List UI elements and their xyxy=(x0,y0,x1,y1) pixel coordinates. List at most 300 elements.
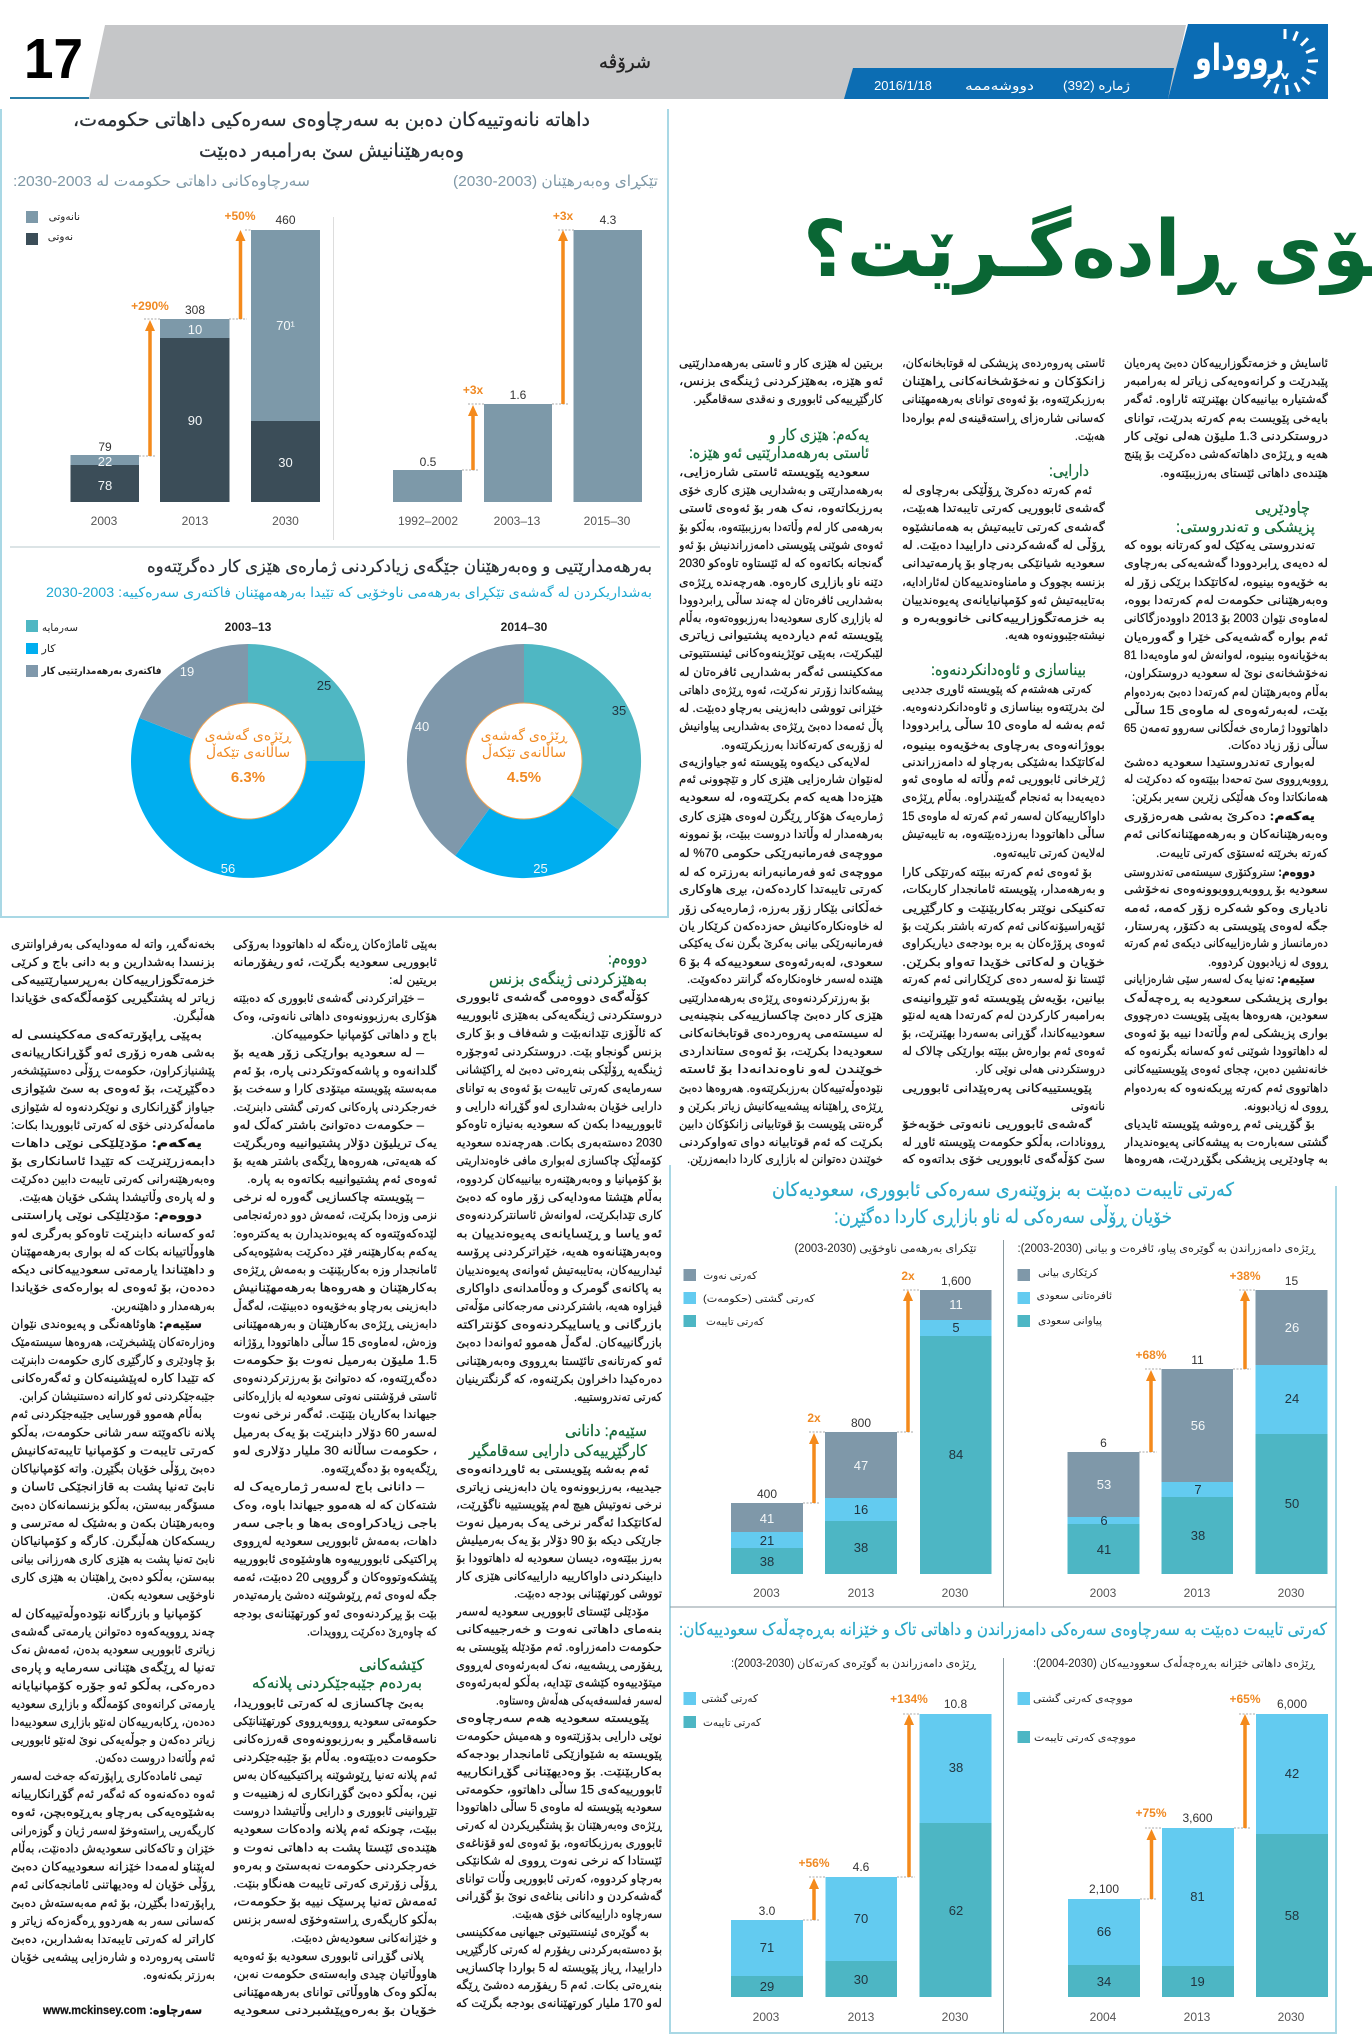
growth arrows: +38% xyxy=(1229,1269,1261,1283)
donut chart 2003-13: 2003–13 xyxy=(225,620,272,634)
text column: business environment and fiscal management: بەهێزکردنی ژینگەی بزنس xyxy=(489,970,647,988)
text column: business environment and fiscal management: دروستکردنی ژینگەیەکی بەهێزی ئابوورییە xyxy=(456,1008,662,1023)
text column: finance and construction: دارایی: xyxy=(1049,463,1089,480)
bars 2013: 16 xyxy=(854,1502,868,1517)
text column: business environment and fiscal management: سعودیە پێویستە لە ماوەی 5 ساڵی داهاتوودا xyxy=(456,1799,662,1815)
text column: role of government and business: بزنسدا بەشدارین و بە دانی باج و کرێی xyxy=(11,955,215,970)
panel heading xyxy=(13,110,658,190)
bar chart: average investment: 0.5 xyxy=(420,455,437,469)
bars 2003: 2003 xyxy=(753,1586,780,1600)
bars 2030: 15 xyxy=(1285,1274,1298,1288)
text column: business environment and fiscal management: بە پاکانەی گومرک و وەڵامدانەی داواکاری xyxy=(456,1280,662,1296)
bars 2030: 2030 xyxy=(942,1586,969,1600)
text column: reforms and challenges: هاووڵاتیان چیدی وابەستەی حکومەت نەبن، xyxy=(233,1966,437,1982)
donut centre label: ساڵانەی تێکەڵ xyxy=(482,743,566,760)
bars 2030: 2030 xyxy=(1278,1586,1305,1600)
bars 2030 xyxy=(1256,1274,1328,1600)
text column: role of government and business: جیاواز گۆڕانکاری و نوێکردنەوە لە شێوازی xyxy=(11,1100,215,1115)
bars 2030: 50 xyxy=(1285,1496,1299,1511)
bars 2013: 11 xyxy=(1191,1353,1204,1367)
logo: ڕووداو xyxy=(1193,37,1290,79)
text column: business environment and fiscal management: وەبەرهێنانەوە هەیە، خێراترکردنی پرۆسە xyxy=(456,1245,662,1260)
text column: role of government and business: دابمەزرێنرێت کە تێیدا ئاسانکاری بۆ xyxy=(11,1154,215,1169)
text column: tourism and health: گەشتیارە بیانییەکان بهێنرێتە ئاراوە. ئەگەر xyxy=(1124,392,1328,407)
text column: role of government and business: یەکەم: مۆدێلێکی نوێی داهات xyxy=(11,1136,202,1151)
text column: tourism and health: بە خۆیەوە بینیوە، لەکاتێکدا برێکی زۆر لە xyxy=(1124,575,1328,590)
bars 2030: 24 xyxy=(1285,1391,1299,1406)
bars 2013: 70 xyxy=(854,1911,868,1926)
text column: business environment and fiscal management: کۆڵەگەی دووەمی گەشەی ئابووری xyxy=(456,989,649,1005)
issue bar: 2016/1/18 xyxy=(874,78,932,93)
text column: business environment and fiscal management: دابینکردنی داواکارییە داراییەکانی هێزی کار xyxy=(456,1569,662,1584)
text column: business environment and fiscal management: لەکاتێکدا ئەگەر نرخی یەک بەرمیل نەوت xyxy=(456,1515,662,1530)
text column: business environment and fiscal management: بنەڕەتی بکات. ئەم 5 ریفۆرمە دەشێ ڕێگە xyxy=(456,1978,662,1993)
text column: labour force: بریتین لە هێزی کار و ئاستی بەرهەمدارێتیی xyxy=(679,356,883,371)
section heading: productivity and investment xyxy=(10,546,660,601)
donut chart 2014-30: 2014–30 xyxy=(501,620,548,634)
bars 2013: 3,600 xyxy=(1182,1811,1213,1825)
bars 2030: 38 xyxy=(949,1760,963,1775)
text column: business environment and fiscal management: کارگێڕییەکی دارایی سەقامگیر xyxy=(468,1442,648,1460)
text column: tourism and health: بواری پزیشکی لەم وڵاتەدا نییە بۆ ئەوەی xyxy=(1124,1025,1328,1041)
bars 2004: 66 xyxy=(1097,1924,1111,1939)
text column: finance and construction: ساڵی داهاتوودا بەرزدەبێتەوە، بە تایبەتیش xyxy=(902,826,1105,842)
text column: labour force: لەنێوان شارەزایی هێزی کار و تێچوونی ئەم xyxy=(679,772,883,787)
text column: role of government and business: تەنیا لە ڕێگەی هێنانی سەرمایە و پارەی xyxy=(11,1661,215,1676)
text column: tourism and health: گشتی سەبارەت بە پیشەکانی پەیوەندیدار xyxy=(1124,1135,1328,1150)
donut chart 2014-30: 40 xyxy=(415,719,429,734)
legend: کەرتی گشتی xyxy=(701,1692,758,1705)
text column: reforms and challenges: پلانی گۆڕانی ئابووری سعودیە بۆ ئەوەیە xyxy=(233,1949,424,1964)
text column: role of government and business: کۆمپانیا و بازرگانە نێودەوڵەتییەکان لە xyxy=(11,1605,202,1621)
stacked bar chart: household income xyxy=(1018,1692,1328,2024)
text column: business environment and fiscal management: بازرگانییەکان. لەگەڵ هەموو ئەوانەدا دەبێ xyxy=(456,1335,662,1351)
text column: tourism and health: دووەم: ستروکتۆری سیستەمی تەندروستی xyxy=(1124,865,1315,880)
bars 2013: 47 xyxy=(854,1458,868,1473)
text column: role of government and business: ببەستن، بەڵکو دەبێ ڕاهێنان بە هێزی کاری xyxy=(11,1569,215,1585)
bar 2030: 460 xyxy=(275,213,296,227)
text column: tourism and health: لە داهاتوودا شوێنی ئەو کەسانە بگرنەوە کە xyxy=(1124,1044,1328,1059)
text column: tourism and health: لەماوەی نێوان 2003 بۆ 2013 داوودەزگاکانی xyxy=(1124,611,1328,626)
text column: reforms and challenges: باج و داهاتی کۆمپانیا حکومییەکان. xyxy=(271,1028,437,1042)
bars 2013: 56 xyxy=(1191,1418,1205,1433)
text column: tourism and health: سعودین، هەروەها بەپێی پێویست دەرچووی xyxy=(1124,1008,1328,1023)
legend: growth factors: سەرمایە xyxy=(42,622,78,634)
text column: business environment and fiscal management: لەو 170 ملیار کورتهێنانەی بودجە بگرێت کە xyxy=(456,1996,662,2011)
text column: business environment and fiscal management xyxy=(456,951,662,2011)
donut chart 2003-13 xyxy=(131,620,365,878)
text column: finance and construction: بەتایبەتیش ئەو کۆمپانیایانەی پەیوەندییان xyxy=(902,593,1105,608)
bars 2003: 29 xyxy=(760,1979,774,1994)
panel heading: سەرچاوەکانی داهاتی حکومەت لە 2003-2030: xyxy=(13,173,310,190)
text column: reforms and challenges: مەبەستە پێویستە میتۆدی کارا و سەخت بۆ xyxy=(233,1082,437,1097)
text column: finance and construction: ئەم کەرتە دەکرێ ڕۆڵێکی بەرچاوی لە xyxy=(902,482,1092,498)
text column: tourism and health: پزیشکی و تەندروستی: xyxy=(1176,519,1315,537)
growth arrows: +134% xyxy=(890,1692,928,1706)
text column: reforms and challenges: ، حکومەت ساڵانە 30 ملیار دۆلاری لەو xyxy=(233,1442,437,1458)
bars 2004: 2004 xyxy=(1090,2010,1117,2024)
bars 2030: 5 xyxy=(952,1320,960,1335)
growth arrows: 2x xyxy=(901,1269,915,1283)
text column: finance and construction: ئێستا نۆ لەسەر دەی کرێکارانی ئەم کەرتە xyxy=(902,972,1105,987)
text column: finance and construction: کەسانی شارەزای ڕاستەقینەی لەم بوارەدا xyxy=(902,411,1105,426)
bars 2003: 400 xyxy=(757,1487,777,1501)
donut centre label: 6.3% xyxy=(231,769,265,786)
text column: reforms and challenges: ناسەقامگیر و بەرزبوونەوەی قەرزەکانی xyxy=(233,1732,437,1747)
text column: business environment and fiscal management: 2030 دەستەبەری بکات. هەرچەندە سعودیە xyxy=(456,1136,662,1150)
growth arrows: +56% xyxy=(798,1856,830,1870)
text column: tourism and health: لەبواری تەندروستیدا سعودیە دەشێ xyxy=(1124,755,1315,770)
text column: finance and construction: بەرامبەر کارکردن لەم کەرتەدا هەیە لەنێو xyxy=(902,1008,1105,1023)
text column: labour force: لە سیستەمی پەروەردەی قوتابخانەکانی xyxy=(679,1026,883,1041)
bar 2013: 2013 xyxy=(182,514,209,528)
text column: reforms and challenges: گلدانەوە و پاشەکەوتکردنی پارە، بۆ ئەم xyxy=(233,1064,437,1079)
legend: نانەوتی xyxy=(49,211,80,223)
section heading: productivity and investment: بەشداریکردن لە گەشەی تێکڕای بەرهەمی ناوخۆیی کە تێیدا بەرهەمهێنان فاکتەری سەرەکییە: 2003-2030 xyxy=(46,584,652,601)
text column: reforms and challenges: ڕۆڵی زۆرتری کەرتی تایبەت هەنگاو بنێت. xyxy=(233,1876,437,1892)
text column: role of government and business xyxy=(11,937,215,2018)
text column: reforms and challenges: بەڵکو کاریگەری ڕاستەوخۆی لەسەر بزنس xyxy=(233,1912,437,1928)
text column: finance and construction: ڕوونادات، بەڵکو حکومەت پێویستە ئاوڕ لە xyxy=(902,1134,1105,1150)
bar 2013 xyxy=(160,303,230,528)
bar 2003: 2003 xyxy=(91,514,118,528)
text column: business environment and fiscal management: بەرز ببێتەوە، دیسان سعودیە لە داهاتوودا بۆ xyxy=(456,1551,662,1566)
growth arrows: +3x xyxy=(553,209,574,223)
text column: finance and construction: کەرتی هەشتەم کە پێویستە ئاوڕی جددیی xyxy=(902,682,1092,697)
bar chart: average investment: 1.6 xyxy=(510,388,527,402)
bars 2013: 2013 xyxy=(1184,1586,1211,1600)
text column: labour force: خێزانی تووشی دابەزینی بەرچاو دەبێت. لە xyxy=(679,701,883,716)
text column: reforms and challenges: کە هەیەتی، هەروەها ڕێگەی باشتر هەیە بۆ xyxy=(233,1154,437,1169)
bars 2030 xyxy=(920,1697,992,2024)
legend: growth factors xyxy=(26,620,162,677)
text column: reforms and challenges: لێدەکەوێتەوە کە پەیوەندیدارن بە یەکترەوە: xyxy=(233,1226,437,1242)
legend: کەرتی تایبەت xyxy=(706,1316,764,1328)
text column: labour force: بەرزبکاتەوە، نەک هەر بۆ ئەوەی ئاستی xyxy=(679,501,883,516)
text column: role of government and business: دەبێ ڕۆڵی خۆیان بگێڕن. واتە کۆمپانیاکان xyxy=(11,1461,215,1477)
bar chart: average investment: 2003–13 xyxy=(494,514,541,528)
text column: role of government and business: ئەوە دەکەنەوە کە ئەگەر ئەم گۆڕانکارییانە xyxy=(11,1787,215,1802)
bars 2003: 41 xyxy=(1097,1542,1111,1557)
donut centre label: ڕێژەی گەشەی xyxy=(205,727,292,744)
text column: tourism and health xyxy=(1124,356,1328,1167)
bars 2013: 81 xyxy=(1190,1889,1205,1904)
text column: reforms and challenges: – دانانی باج لەسەر ژمارەیەک لە xyxy=(233,1480,424,1495)
bars 2013: 38 xyxy=(1191,1528,1205,1543)
bars 2013: 2013 xyxy=(1184,2010,1211,2024)
bars 2013 xyxy=(1162,1811,1234,2024)
text column: reforms and challenges: – خێراترکردنی گەشەی ئابووری کە دەبێتە xyxy=(233,991,424,1006)
text column: reforms and challenges: دابەزینی ڕێژەی بەکارهێنان و بەرهەمهێنانی xyxy=(233,1317,437,1332)
text column: finance and construction: بۆ ئەوەی ئەم کەرتە ببێتە کەرتێکی کارا xyxy=(902,865,1092,880)
text column: reforms and challenges: یەک تریلیۆن دۆلار پشتیوانییە وەربگرێت xyxy=(233,1136,437,1151)
text column: reforms and challenges: خەرجکردنی حکومەت نەبەستێ و بەرەو xyxy=(233,1858,437,1874)
text column: role of government and business: نابێ تەنیا پشت بە قازانجێکی ئاسان و xyxy=(11,1480,215,1495)
legend xyxy=(684,1269,815,1328)
bars 2003: 2003 xyxy=(1090,1586,1117,1600)
text column: tourism and health: بواری پزیشکی سعودیە بە ڕەچەڵەک xyxy=(1124,990,1328,1006)
panel heading: تێکڕای وەبەرهێنان (2003-2030) xyxy=(453,173,658,190)
text column: role of government and business: دەگێڕێت، بۆ ئەوەی بە سێ شێوازی xyxy=(11,1082,215,1097)
bars 2013: 4.6 xyxy=(853,1860,870,1874)
bars 2003: 2003 xyxy=(753,2010,780,2024)
section band xyxy=(89,25,1186,99)
text column: tourism and health: سێیەم: تەنیا یەک لەسەر سێی شارەزایانی xyxy=(1124,972,1315,987)
text column: role of government and business: وەبەرهێنەرانی کەرتی تایبەت دابین دەکرێت xyxy=(11,1172,215,1187)
text column: reforms and challenges: بریتین لە: xyxy=(389,973,437,988)
text column: role of government and business: کە تێیدا کارە لەپێشینەکان و ئەگەرەکانی xyxy=(11,1371,215,1386)
text column: reforms and challenges: – حکومەت دەتوانێ باشتر کەڵک لەو xyxy=(233,1117,424,1133)
text column: reforms and challenges: حکومەت دەبێتەوە. بەڵام بۆ جێبەجێکردنی xyxy=(233,1749,437,1765)
bar chart: average investment: 4.3 xyxy=(600,213,617,227)
text column: finance and construction: گەشەی ئابووریی کەرتی تایبەتدا هەبێت، xyxy=(902,501,1105,516)
bars 2003 xyxy=(731,1487,803,1600)
bars 2003: 3.0 xyxy=(759,1904,776,1918)
source credit: سەرچاوە: www.mckinsey.com xyxy=(42,2003,202,2018)
bars 2013 xyxy=(1162,1353,1233,1600)
issue bar: دووشەممە xyxy=(965,79,1034,94)
text column: role of government and business: کەرتی تایبەت و کۆمپانیا تایبەتەکانیش xyxy=(11,1444,215,1458)
panel frame: private sector charts xyxy=(669,1165,1337,2034)
growth arrows: +3x xyxy=(463,383,484,397)
bars 2004: 2,100 xyxy=(1089,1882,1119,1896)
text column: labour force: ئەو هێزە، بەهێزکردنی ژینگەی بزنس، xyxy=(679,374,883,389)
text column: reforms and challenges: کێشەکانی xyxy=(359,1657,425,1674)
bars 2013: 2013 xyxy=(848,2010,875,2024)
text column: tourism and health: هەیە و ڕێژەی داهاتەکەشی دەکرێت بۆ پێنج xyxy=(1124,447,1328,462)
bar 2003 xyxy=(70,440,139,528)
text column: business environment and fiscal management: ئابوورییەدا بکەن کە سعودیە بەنیازە تاوەکو xyxy=(456,1117,662,1132)
text column: labour force: لەلایەکی دیکەوە پێویستە ئەو جیاوازیەی xyxy=(679,755,870,770)
text column: reforms and challenges: لەسەر 60 دۆلار دابنرێت بۆ یەک بەرمیل xyxy=(233,1425,437,1440)
text column: role of government and business: زیاتر لە پشتگیریی کۆمەڵگەکەی خۆیاندا xyxy=(11,990,215,1006)
text column: business environment and fiscal management: ئەو یاسا و ڕێسایانەی پەیوەندییان بە xyxy=(456,1226,662,1241)
text column: labour force: خوێندن لەو ناوەندانەدا بۆ ئاستە xyxy=(679,1062,883,1077)
text column: business environment and fiscal management: جیدییە، بەرزبوونەوە یان دابەزینی زیاتری xyxy=(456,1480,662,1495)
legend: مووچەی کەرتی گشتی xyxy=(1033,1692,1133,1705)
text column: role of government and business: ڕاپۆرتەدا بگێڕن، بۆ ئەم مەبەستەش دەبێ xyxy=(11,1896,215,1911)
text column: tourism and health: لە دەیەی ڕابردوودا گەشەیەکی بەرچاوی xyxy=(1124,556,1328,571)
donut chart 2014-30: 35 xyxy=(612,703,626,718)
text column: reforms and challenges: وزەش، لەماوەی 15 ساڵی داهاتوودا ڕۆژانە xyxy=(233,1334,437,1350)
text column: tourism and health: دروستکردنی 1.3 ملیۆن هەلی نوێی کار xyxy=(1124,429,1328,444)
text column: labour force: کەرتی تایبەتدا کاردەکەن، بڕی هاوکاری xyxy=(679,882,883,897)
text column: finance and construction: بووژانەوەی بەرچاوی بەخۆیەوە بینیوە، xyxy=(902,738,1105,753)
legend xyxy=(1018,1692,1136,1744)
chart heading: household income: ڕێژەی داهاتی خێزانە بەڕەچەڵەک سعوودییەکان (2030-2004): xyxy=(1033,1656,1316,1671)
text column: reforms and challenges: باجی زیادکراوەی بەها و باجی سەر xyxy=(233,1516,437,1531)
bars 2030: 10.8 xyxy=(944,1697,968,1711)
growth arrows: +68% xyxy=(1135,1348,1167,1362)
logo xyxy=(1168,24,1328,99)
bar 2013: 90 xyxy=(188,413,202,428)
legend: مووچەی کەرتی تایبەت xyxy=(1034,1732,1136,1744)
text column: role of government and business: ریسکەکان هەڵبگرن. کارگە و کۆمپانیاکان xyxy=(11,1533,215,1549)
text column: role of government and business: بخەنەگەڕ، واتە لە مەودایەکی بەرفراوانتری xyxy=(11,937,215,952)
bars 2004: 34 xyxy=(1097,1974,1111,1989)
text column: labour force: هێزەدا هەیە کەم بکرێتەوە، لە سعودیە xyxy=(679,790,883,805)
donut chart 2014-30: 25 xyxy=(533,861,548,876)
text column: finance and construction: گەشەی ئابووریی نانەوتی خۆبەخۆ xyxy=(902,1117,1092,1132)
section heading: productivity and investment: بەرهەمدارێتیی و وەبەرهێنان جێگەی زیادکردنی ژمارەی هێزی کار دەگرێتەوە xyxy=(147,556,652,576)
text column: reforms and challenges: دابەزینی بەرچاو بەخۆیەوە دەبینێت، لەگەڵ xyxy=(233,1298,437,1314)
text column: reforms and challenges: ئەمەش تەنیا پرسێک نییە بۆ حکومەت، xyxy=(233,1895,437,1910)
text column: reforms and challenges: بەردەم جێبەجێکردنی پلانەکە xyxy=(252,1675,422,1693)
text column: tourism and health: پێبدرێت و کرانەوەیەکی زیاتر لە بەرامبەر xyxy=(1124,374,1328,389)
text column: labour force: پێویستە ئەم دیاردەیە پشتیوانی زیاتری xyxy=(679,628,883,643)
text column: business environment and fiscal management: ئێستادا کە نرخی نەوت ڕووی لە شکانێکی xyxy=(456,1854,662,1869)
text column: labour force: بکرێت کە ئەم قوتابیانە دوای تەواوکردنی xyxy=(679,1135,883,1150)
stacked bar chart: employment by sector xyxy=(684,1692,992,2024)
text column: finance and construction: ئەم بەشە لە ماوەی 10 ساڵی ڕابردوودا xyxy=(902,717,1105,733)
text column: role of government and business: بەپێی ڕاپۆرتەکەی مەککینسی لە xyxy=(11,1028,202,1042)
issue bar xyxy=(844,68,1174,99)
text column: tourism and health: بێت، لەبەرئەوەی لە ماوەی 15 ساڵی xyxy=(1124,702,1328,718)
chart heading: employment by group: ڕێژەی دامەزراندن بە گوێرەی پیاو، ئافرەت و بیانی (2030-2003): xyxy=(1018,1241,1316,1256)
text column: business environment and fiscal management: دەرەکیدا داخراون بکرێنەوە، کە گرنگترینیان xyxy=(456,1372,662,1387)
bars 2013: 7 xyxy=(1194,1482,1202,1497)
text column: reforms and challenges: بەکارهێنان و هەروەها بەرهەمهێنانیش xyxy=(233,1281,437,1296)
text column: reforms and challenges: ئامانجدار وزە بەکاربێنێت و بەمەش ڕێژەی xyxy=(233,1263,437,1278)
text column: role of government and business: دەرەکی، بەڵکو ئەو جۆرە کۆمپانیایانە xyxy=(11,1678,215,1694)
section heading: private sector as engine of economy: کەرتی تایبەت دەبێت بە بزوێنەری سەرەکی ئابووری، سعودیەکان xyxy=(772,1180,1235,1201)
text column: reforms and challenges: بێت بۆ پڕکردنەوەی ئەو کورتهێنانەی بودجە xyxy=(233,1606,437,1621)
bar 2030 xyxy=(251,213,320,528)
text column: business environment and fiscal management: کە ئاڵۆزی تێدانەبێت و شەفاف و بۆ کاری xyxy=(456,1025,662,1041)
text column: reforms and challenges: ئەوەی ئەم پشتیوانییە بکاتەوە بە پارە. xyxy=(247,1172,437,1187)
text column: business environment and fiscal management: داراییدا، ڕیاز پێویستە لە 5 بواردا چاکسازیی xyxy=(456,1960,662,1975)
page number: 17 xyxy=(24,27,83,91)
text column: business environment and fiscal management: نوێی دارایی بدۆزێتەوە و هەمیش حکومەت xyxy=(456,1729,662,1744)
text column: role of government and business: دووەم: مۆدێلێکی نوێی پاراستنی xyxy=(11,1208,202,1223)
issue bar: ژمارە (392) xyxy=(1063,79,1130,94)
section heading: private sector as engine of economy xyxy=(772,1180,1235,1228)
section band: شرۆڤە xyxy=(599,52,651,73)
text column: role of government and business: ڕۆڵی خۆیان لە وەدیهاتنی ئامانجەکانی ئەم xyxy=(11,1877,215,1893)
text column: tourism and health: یەکەم: دەکرێ بەشی هەرەزۆری xyxy=(1124,809,1315,824)
text column: labour force: سعودیە پێویستە ئاستی شارەزایی، xyxy=(679,465,870,480)
growth arrows xyxy=(462,209,574,470)
donut centre label: ڕێژەی گەشەی xyxy=(481,727,568,744)
bar chart: average investment xyxy=(333,209,642,540)
text column: business environment and fiscal management: دووەم: xyxy=(608,951,647,969)
text column: role of government and business: و داهێناندا یارمەتی سعودییەکانی دیکە xyxy=(11,1263,215,1278)
bar chart: average investment: 1992–2002 xyxy=(398,514,458,528)
bar 2030: 70¹ xyxy=(276,318,296,333)
growth arrows xyxy=(803,1269,920,1503)
text column: reforms and challenges xyxy=(233,937,437,2018)
text column: reforms and challenges: یەکەم بەکارهێنەر فێر دەکرێت بەشێوەیەکی xyxy=(233,1244,437,1260)
growth arrows xyxy=(131,209,256,456)
text column: finance and construction: بە خزمەتگوزارییەکانی خانووبەرە و xyxy=(902,611,1105,626)
text column: finance and construction: پێویستییەکانی پەرەپێدانی ئابووریی xyxy=(902,1081,1092,1096)
chart heading: average domestic product: تێکرای بەرهەمی ناوخۆیی (2030-2003) xyxy=(794,1243,976,1256)
text column: reforms and challenges: بەبێ چاکسازی لە کەرتی ئابووریدا، xyxy=(233,1696,424,1711)
text column: finance and construction xyxy=(902,356,1105,1167)
bar chart: average investment: 2015–30 xyxy=(584,514,631,528)
chart heading: employment by sector: ڕێژەی دامەزراندن بە گوێرەی کەرتەکان (2030-2003): xyxy=(731,1656,977,1671)
text column: reforms and challenges: شتەکان کە لە هەموو جیهاندا باوە، وەک xyxy=(233,1498,437,1513)
text column: finance and construction: سێ کۆڵەگەی ئابووریی خۆی بداتەوە کە xyxy=(902,1151,1105,1167)
text column: labour force: گەنجانە بکاتەوە کە لە ئێستاوە تاوەکو 2030 xyxy=(679,556,883,571)
legend: کرێکاری بیانی xyxy=(1038,1267,1098,1279)
text column: labour force: لێبکرێت، بەپێی توێژینەوەکانی ئینستتیوتی xyxy=(679,646,883,661)
panel heading: داهاتە نانەوتییەکان دەبن بە سەرچاوەی سەرەکیی داهاتی حکومەت، xyxy=(73,110,590,131)
donut centre label xyxy=(481,727,568,786)
text column: tourism and health: جگە لەوەی پێویستی بە دکتۆر، پەرستار، xyxy=(1124,919,1328,934)
stacked bar chart: employment by group xyxy=(1018,1267,1328,1600)
text column: reforms and challenges: ئابووریی سعودیە بگرێت، ئەو ریفۆرمانە xyxy=(233,955,437,970)
text column: reforms and challenges: ئەم پلانە تەنیا ڕێوشوێنە پراکتیکییەکان بەس xyxy=(233,1768,437,1783)
bar 2003: 78 xyxy=(98,478,112,493)
bars 2030: 58 xyxy=(1285,1908,1299,1923)
legend: ئافرەتانی سعودی xyxy=(1037,1290,1112,1302)
bars 2030: 42 xyxy=(1285,1766,1299,1781)
donut chart 2003-13: 56 xyxy=(221,861,235,876)
legend: پیاوانی سعودی xyxy=(1038,1315,1102,1327)
text column: business environment and fiscal management: بەکاربێنێت. بۆ وەدیهێنانی گۆڕانکارییە xyxy=(456,1765,662,1780)
text column: finance and construction: ڕۆڵی لە گەشەکردنی داراییدا دەبێت. لە xyxy=(902,537,1105,553)
text column: finance and construction: و بەرهەمدار، پێویستە ئامانجدار کاربکات، xyxy=(902,882,1105,897)
text column: tourism and health: بە چاودێریی پزیشکی بگۆڕدرێت، هەروەها xyxy=(1124,1152,1328,1167)
growth arrows xyxy=(798,1692,928,1920)
text column: finance and construction: بیناسازی و ئاوەدانکردنەوە: xyxy=(931,662,1086,680)
text column: role of government and business: تیمی ئامادەکاری ڕاپۆرتەکە جەخت لەسەر xyxy=(11,1769,202,1784)
text column: finance and construction: ژێرخانی ئابووریی ئەم وڵاتە لە ماوەی ئەو xyxy=(902,771,1105,787)
text column: finance and construction: لەکاتێکدا بەشێکی بەرچاو لە دامەزراندنی xyxy=(902,755,1105,770)
text column: reforms and challenges: پێشکەوتووەکان و گرووپی 20 دەبێت، ئەمە xyxy=(233,1570,437,1585)
text column: labour force: دێنە ناو بازاڕی کارەوە. هەرچەندە ڕێژەی xyxy=(679,575,883,590)
text column: finance and construction: سعودییەکاندا، گۆڕانی بەسەردا بهێنرێت، بۆ xyxy=(902,1026,1105,1041)
text column: labour force: مەککینسی ئەگەر بەشداریی ئافرەتان لە xyxy=(679,665,883,680)
growth arrows: +75% xyxy=(1135,1806,1167,1820)
donut centre label xyxy=(205,727,292,786)
donut chart 2003-13: 25 xyxy=(317,678,331,693)
text column: business environment and fiscal management: پێویستە سعودیە هەم سەرچاوەی xyxy=(456,1711,649,1726)
legend: نەوتی xyxy=(48,231,73,243)
text column: reforms and challenges: داهات، بەمەش ئابووریی سعودیە لەڕووی xyxy=(233,1534,437,1549)
text column: labour force: مووچەی فەرمانبەرێکی حکومی 70% لە xyxy=(679,846,883,861)
text column: business environment and fiscal management: سێیەم: دانانی xyxy=(565,1423,647,1440)
text column: business environment and fiscal management: مۆدێلی ئێستای ئابووریی سعودیە لەسەر xyxy=(456,1604,649,1619)
text column: role of government and business: ئەو کەسانە دابنرێت تاوەکو بەرگری لەو xyxy=(11,1226,215,1242)
text column: business environment and fiscal management: بنەمای داهاتی نەوت و خەرجییەکانی xyxy=(456,1622,662,1637)
text column: tourism and health: وەبەرهێنانەکان و بەرهەمهێنانەکانی ئەم xyxy=(1124,827,1328,842)
text column: role of government and business: مسۆگەر ببەستن، بەڵکو بزنسمانەکان دەبێ xyxy=(11,1497,215,1513)
donut centre label: 4.5% xyxy=(507,769,541,786)
text column: business environment and fiscal management: جارێکی دیکە بۆ 90 دۆلار بۆ یەک بەرمیلیش xyxy=(456,1533,662,1548)
text column: labour force: هێزی کار دەبێ چاکسازییەکی بنچینەیی xyxy=(679,1008,883,1023)
growth arrows: 2x xyxy=(807,1411,821,1425)
text column: tourism and health: تەندروستی یەکێک لەو کەرتانە بووە کە xyxy=(1124,538,1315,553)
text column: labour force: سعودی، لەبەرئەوەی سعودییەکە 4 بۆ 6 xyxy=(679,955,883,970)
text column: role of government and business: بەڵام هەموو قورسایی جێبەجێکردنی ئەم xyxy=(11,1406,202,1422)
text column: tourism and health: بۆ گۆڕینی ئەم ڕەوشە پێویستە ئایدیای xyxy=(1124,1117,1315,1132)
text column: business environment and fiscal management: ئەو کەرتانەی تائێستا بەڕووی وەبەرهێنانی xyxy=(456,1354,662,1369)
text column: tourism and health: داهاتووی ئەم کەرتە پڕبکەنەوە کە بەردەوام xyxy=(1124,1081,1328,1096)
text column: role of government and business: بەشێوەیەکی بەرچاو بەڕێوەبچن، ئەوە xyxy=(11,1805,215,1820)
text column: reforms and challenges: خۆیان بۆ بەرەوپێشبردنی سعودیە xyxy=(233,2003,437,2018)
bar 2030: 30 xyxy=(278,455,293,470)
text column: business environment and fiscal management: بزنس گونجاو بێت. دروستکردنی ئەوجۆرە xyxy=(456,1044,662,1060)
text column: business environment and fiscal management: نرخی نەوتیش هیچ لەم پێویستییە ناگۆڕێت، xyxy=(456,1498,662,1513)
legend: کەرتی تایبەت xyxy=(703,1717,761,1729)
bars 2013: 30 xyxy=(854,1972,868,1987)
text column: finance and construction: بزنسە بچووک و مامناوەندییەکان لەئارادایە، xyxy=(902,575,1105,590)
text column: finance and construction: خۆیان و لەکاتی خۆیدا تەواو بکرێن. xyxy=(902,955,1105,970)
bar 2013: 308 xyxy=(185,303,205,317)
text column: reforms and challenges: نین، بەڵکو دەبێ گۆڕانکاری لە زهنییەت و xyxy=(233,1785,437,1801)
